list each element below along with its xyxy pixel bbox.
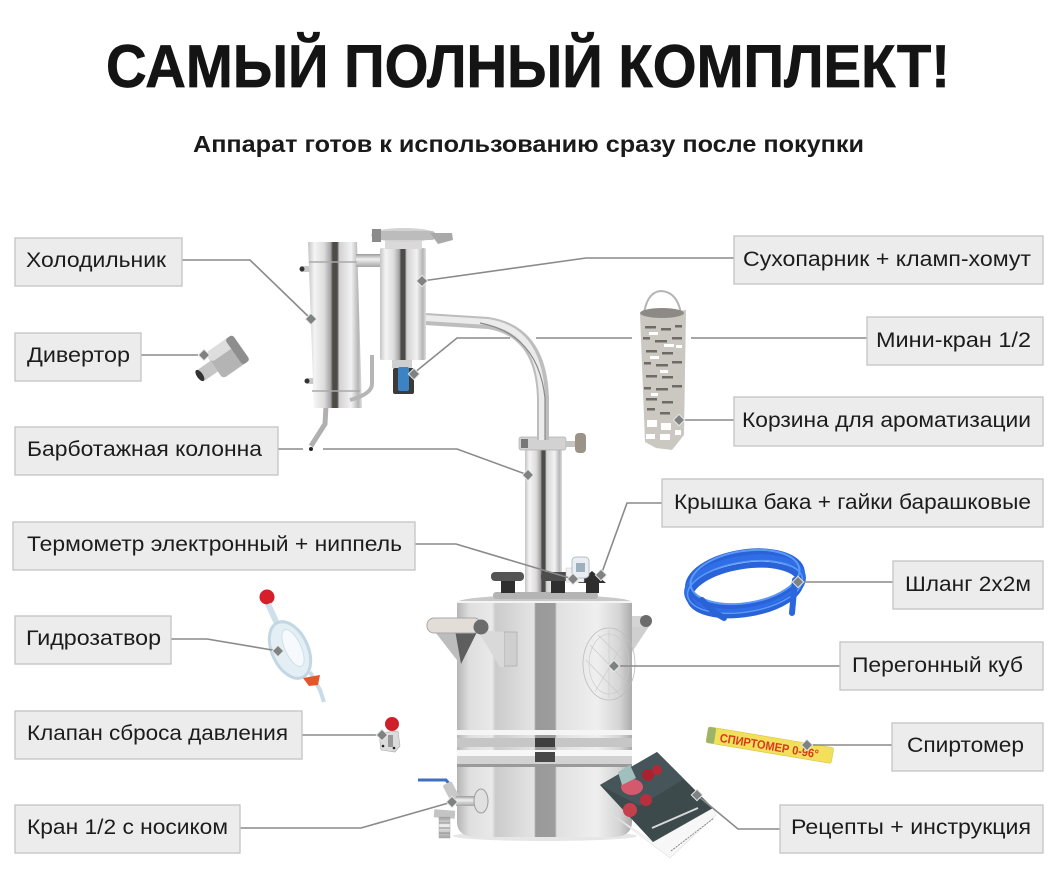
label: recipes: Рецепты + инструкция xyxy=(791,816,1031,839)
marker diamonds xyxy=(198,275,813,808)
label: recipes xyxy=(780,805,1043,853)
subtitle: Аппарат готов к использованию сразу после покупки xyxy=(193,131,864,157)
part: steam pipe xyxy=(425,318,545,440)
part: spirit meter: СПИРТОМЕР 0-96° xyxy=(719,731,820,761)
part: flavouring basket xyxy=(640,291,686,450)
label: thermometer xyxy=(13,522,415,570)
label: lid xyxy=(662,479,1043,527)
label: dry steamer xyxy=(734,236,1043,284)
label: spirit meter xyxy=(892,723,1043,771)
part: lid with wing nuts and thermometer xyxy=(491,557,606,593)
part: drain tap with nozzle xyxy=(418,780,488,838)
label: relief valve: Клапан сброса давления xyxy=(27,722,288,745)
label: tap: Кран 1/2 с носиком xyxy=(27,816,228,839)
label: relief valve xyxy=(15,711,302,759)
label: basket xyxy=(734,397,1043,446)
leader lines xyxy=(141,258,893,829)
label: condenser: Холодильник xyxy=(26,249,167,272)
part: blue hose xyxy=(684,543,806,622)
part: condenser xyxy=(300,242,386,451)
label: mini valve: Мини-кран 1/2 xyxy=(876,329,1031,352)
label: mini valve xyxy=(867,317,1043,365)
label: tap xyxy=(15,805,240,853)
part: dry steamer with clamp and mini valve xyxy=(371,228,453,394)
label: bubble column xyxy=(15,427,278,475)
part: pressure relief valve xyxy=(379,717,400,752)
label: airlock xyxy=(15,616,171,664)
part: airlock xyxy=(260,590,324,702)
title: САМЫЙ ПОЛНЫЙ КОМПЛЕКТ! xyxy=(106,33,950,100)
label: hose: Шланг 2х2м xyxy=(905,573,1031,596)
label: lid: Крышка бака + гайки барашковые xyxy=(674,491,1031,514)
part: boiler kettle xyxy=(427,592,652,841)
label: diverter xyxy=(15,333,141,381)
part: bubble column xyxy=(519,433,586,592)
part: recipe booklet xyxy=(600,752,716,858)
label: diverter: Дивертор xyxy=(27,344,130,367)
label: thermometer: Термометр электронный + ниппель xyxy=(27,533,402,556)
label: hose xyxy=(893,561,1043,609)
label: boiler xyxy=(840,642,1043,690)
label: basket: Корзина для ароматизации xyxy=(742,409,1031,432)
label: bubble column: Барботажная колонна xyxy=(27,438,262,461)
label: airlock: Гидрозатвор xyxy=(26,627,161,650)
label: boiler: Перегонный куб xyxy=(852,654,1023,677)
part: diverter xyxy=(189,335,250,390)
label: condenser xyxy=(15,238,182,286)
label: dry steamer: Сухопарник + кламп-хомут xyxy=(743,248,1031,271)
label: spirit meter: Спиртомер xyxy=(907,734,1024,757)
